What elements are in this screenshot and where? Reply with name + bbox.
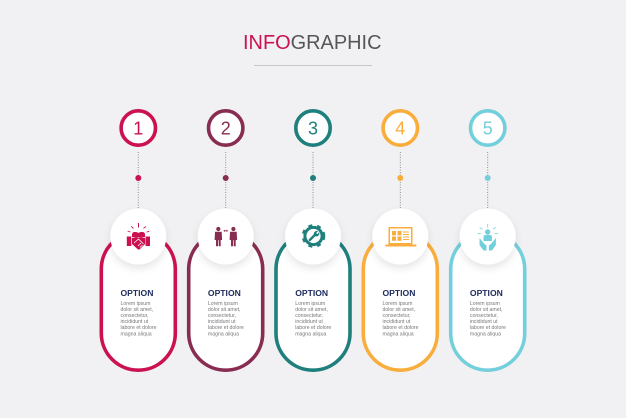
- option text 5: consectetur,: [470, 313, 498, 319]
- option text 1: OPTION: [120, 288, 153, 298]
- number badge 3: 3: [308, 118, 318, 138]
- option text 3: consectetur,: [295, 313, 323, 319]
- title: INFOGRAPHIC: [243, 32, 382, 54]
- number badge 4: [383, 111, 417, 145]
- number badge 5: 5: [483, 118, 493, 138]
- option text 1: consectetur,: [120, 313, 148, 319]
- icon circle 3: [285, 208, 341, 264]
- option text 3: labore et dolore: [295, 325, 331, 331]
- panel: option 2: [189, 111, 263, 370]
- panel: option 1: [101, 111, 175, 370]
- option text 2: labore et dolore: [208, 325, 244, 331]
- icon: two people: [215, 227, 237, 246]
- option text 3: [295, 288, 331, 337]
- icon circle 5: [460, 208, 516, 264]
- number badge 1: [121, 111, 156, 145]
- option text 1: [120, 288, 157, 337]
- option text 4: OPTION: [382, 288, 415, 298]
- number badge 5: [470, 111, 505, 145]
- panel: option 4: [363, 111, 437, 370]
- option text 5: incididunt ut: [470, 319, 498, 325]
- icon circle 4: [372, 208, 428, 264]
- marker dot 2: [223, 175, 229, 181]
- number badge 4: 4: [395, 118, 405, 138]
- option text 4: dolor sit amet,: [382, 307, 415, 313]
- icon circle 2: [198, 208, 254, 264]
- icon: person in hands with rays: [478, 224, 498, 250]
- marker dot 5: [485, 175, 491, 181]
- pill card 2: [189, 232, 263, 370]
- option text 4: labore et dolore: [382, 325, 419, 331]
- option text 1: dolor sit amet,: [120, 307, 153, 313]
- pill card 4: [363, 232, 437, 370]
- option text 3: OPTION: [295, 288, 328, 298]
- panel: option 5: [451, 111, 525, 370]
- option text 2: consectetur,: [208, 313, 236, 319]
- option text 1: labore et dolore: [120, 325, 157, 331]
- number badge 2: 2: [221, 118, 231, 138]
- marker dot 3: [310, 175, 316, 181]
- panel: option 3: [276, 111, 350, 370]
- option text 3: Lorem ipsum: [295, 301, 325, 307]
- number badge 2: [208, 111, 243, 145]
- pill card 3: [276, 232, 350, 370]
- marker dot 1: [135, 175, 141, 181]
- option text 1: Lorem ipsum: [120, 301, 150, 307]
- option text 1: magna aliqua: [120, 331, 152, 337]
- option text 2: OPTION: [208, 288, 241, 298]
- option text 2: Lorem ipsum: [208, 301, 238, 307]
- pill card 1: [101, 232, 175, 370]
- option text 4: incididunt ut: [382, 319, 411, 325]
- icon: laptop dashboard: [385, 227, 416, 246]
- option text 2: incididunt ut: [208, 319, 236, 325]
- option text 5: labore et dolore: [470, 325, 506, 331]
- marker dot 4: [397, 175, 403, 181]
- option text 4: magna aliqua: [382, 331, 414, 337]
- option text 1: incididunt ut: [120, 319, 149, 325]
- option text 2: dolor sit amet,: [208, 307, 240, 313]
- number badge 3: [296, 111, 330, 145]
- option text 2: [208, 288, 244, 337]
- number badge 1: 1: [133, 118, 143, 138]
- option text 5: Lorem ipsum: [470, 301, 500, 307]
- icon: handshake: [127, 223, 150, 250]
- icon circle 1: [110, 208, 166, 264]
- option text 5: [470, 288, 506, 337]
- option text 3: incididunt ut: [295, 319, 323, 325]
- icon: gear with wrench: [303, 225, 324, 247]
- pill card 5: [451, 232, 525, 370]
- option text 5: magna aliqua: [470, 331, 501, 337]
- option text 5: dolor sit amet,: [470, 307, 502, 313]
- option text 4: consectetur,: [382, 313, 410, 319]
- option text 4: [382, 288, 419, 337]
- option text 3: magna aliqua: [295, 331, 326, 337]
- option text 5: OPTION: [470, 288, 503, 298]
- option text 2: magna aliqua: [208, 331, 239, 337]
- option text 3: dolor sit amet,: [295, 307, 328, 313]
- option text 4: Lorem ipsum: [382, 301, 412, 307]
